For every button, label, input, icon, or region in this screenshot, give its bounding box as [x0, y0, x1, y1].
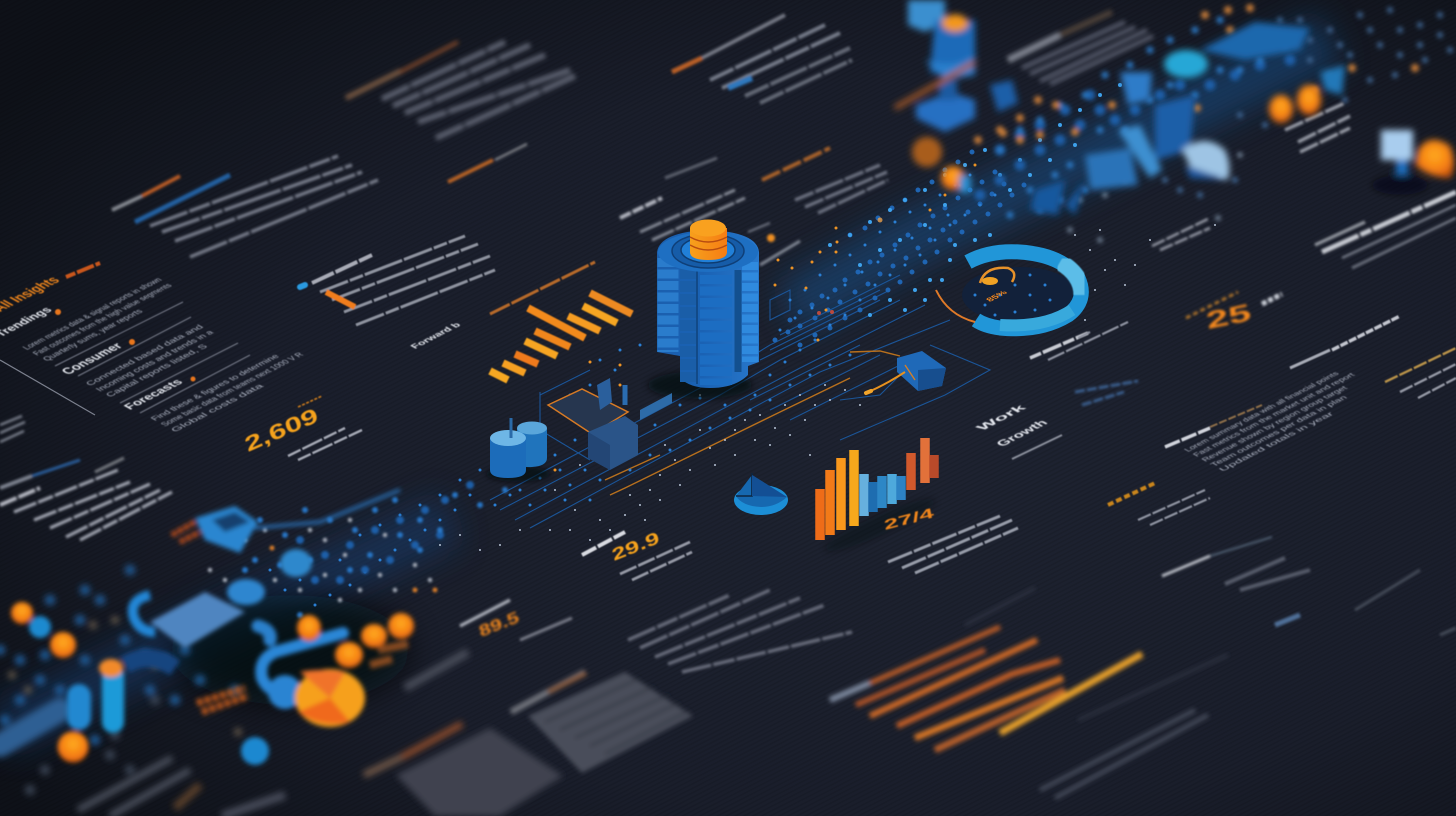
stat: 29.9 [582, 528, 692, 580]
paragraph 1: Fast outcomes from the high value segments [30, 282, 174, 357]
blue flat disc [227, 579, 265, 605]
paragraph rows: Updated totals in year [1217, 410, 1336, 473]
ring segments [968, 252, 1081, 329]
red columns [911, 438, 934, 490]
subheading: summary: Consumer [58, 341, 126, 376]
text block: white two-line heading: Growth [994, 419, 1051, 448]
text block: below ring [1030, 322, 1128, 360]
icon: central blue tower [648, 220, 759, 399]
stat: 2,609: 2,609 [242, 404, 322, 457]
text block: bottom left rows [78, 758, 285, 816]
particles: blurred upper right [978, 8, 1450, 240]
orange label blot [172, 522, 200, 542]
stat: 89.5: 89.5 [477, 609, 521, 641]
light blue slab [150, 592, 245, 648]
text block: mid left panel [300, 236, 495, 325]
icon: blue isometric box [195, 490, 400, 553]
orange capsules [1269, 95, 1293, 123]
paragraph 3: Some basic data from teams next 1000 V R [158, 351, 306, 428]
paragraph rows: Fast metrics from the market unit and report [1191, 371, 1358, 458]
text block: right upper panel [1315, 192, 1456, 268]
orange balls [11, 602, 33, 624]
paragraph 2: Incoming costs and trends in a [93, 329, 216, 393]
text block: small blue tag [1075, 381, 1138, 405]
text block: left insights panel [0, 263, 316, 433]
cluster: lower left blurred objects [11, 490, 414, 765]
stat: 2.4 [1108, 483, 1210, 525]
text block: bottom grey slab [511, 672, 693, 773]
text block: orange heading centre [448, 144, 527, 182]
stat: 27/4: 27/4 [883, 505, 936, 533]
text block: white two-line heading [974, 403, 1062, 459]
particles: blurred lower left [210, 485, 505, 615]
cyan disc [1164, 50, 1208, 78]
paragraph 2: Connected based data and [83, 323, 206, 387]
stacked blue tower [895, 0, 975, 132]
paragraph 3: Global costs data [168, 382, 266, 433]
icon: twin tanks [486, 418, 550, 482]
text block: bottom right rows [1040, 710, 1208, 798]
text block: upper left panel [112, 156, 378, 257]
orange columns [820, 450, 854, 540]
blue dome [280, 549, 312, 577]
orange balls upper left [912, 137, 942, 167]
tower top rings [658, 232, 758, 272]
ring inner specks [975, 275, 1050, 315]
text block: right white heading [1290, 316, 1400, 368]
dark blue pipes [125, 658, 175, 668]
light tile and orange stack [1372, 130, 1454, 195]
cluster: upper right blurred objects [895, 0, 1454, 215]
paragraph rows: Revenue shown by region group target [1199, 384, 1350, 463]
text block: lower right [1162, 537, 1456, 635]
shadow under left cluster [170, 595, 410, 705]
text block: white two-line heading: Work [974, 403, 1030, 432]
stat: 25 [1186, 292, 1282, 335]
chart: diagonal orange bars [490, 293, 632, 380]
icon: progress ring: 85% [984, 289, 1010, 303]
subheading: forecast: Forecasts [120, 377, 186, 411]
tower segmented fins [668, 258, 750, 385]
text block: bottom left grey slab [364, 652, 563, 816]
text block: right centre panel [1165, 366, 1384, 473]
orange coin stack [690, 220, 727, 260]
text block: lower centre rows [628, 590, 852, 672]
text block: centre right upper [762, 148, 888, 213]
text block: far left small [0, 416, 25, 442]
blue blobs [1200, 22, 1310, 60]
blue hook pipe [261, 633, 343, 694]
paragraph rows [1182, 366, 1384, 473]
orange trace [605, 351, 900, 495]
blue nub [258, 626, 270, 640]
ring inner dial [936, 268, 1014, 322]
paragraph 3: Find these & figures to determine [148, 353, 282, 422]
text block: small upper right [1152, 103, 1350, 250]
text block: centre upper [620, 158, 800, 265]
chart: 3D column histogram [820, 438, 939, 559]
stat: 89.5 [460, 600, 572, 641]
text block: top centre list [672, 15, 852, 103]
blue columns [864, 474, 901, 516]
stat: 2,609 [242, 396, 362, 460]
paragraph 2 [83, 323, 226, 398]
particle trail: blue glow band [0, 40, 1330, 730]
heading: chart title: Forward b [408, 321, 464, 350]
paragraph 2: Capital reports listed, S [103, 343, 210, 398]
blue cube [990, 80, 1018, 112]
paragraph rows: Lorem summary data with all financial points [1182, 370, 1341, 453]
stat: 29.9: 29.9 [609, 528, 662, 565]
stat: 25: 25 [1204, 299, 1253, 335]
divider line [0, 360, 95, 415]
chart: bottom diagonal bars [830, 588, 1228, 750]
text block: top right list [1008, 12, 1153, 84]
circuit traces [490, 275, 990, 528]
text block: top left list [346, 42, 575, 138]
icon: control platform [548, 378, 672, 470]
chart: pie disc [734, 473, 788, 515]
paragraph 1: Lorem metrics data & signal reports in shown [20, 276, 164, 351]
paragraph 1: Quarterly sums, year reports [40, 308, 145, 362]
blue ball [241, 737, 269, 765]
paragraph rows: Team outcomes per data in plan [1208, 394, 1349, 468]
icon: device module [866, 351, 946, 393]
text block: right edge [1385, 348, 1456, 398]
text block: lower left [0, 458, 172, 540]
blue loop [133, 595, 155, 632]
pale blue rock [1182, 141, 1229, 180]
particles: focused centre [270, 85, 1215, 605]
text block: below histogram [888, 516, 1018, 573]
orange pie [295, 669, 365, 727]
heading: chart title [408, 262, 595, 350]
icon: progress ring [936, 252, 1082, 329]
orange text blot [197, 688, 248, 712]
